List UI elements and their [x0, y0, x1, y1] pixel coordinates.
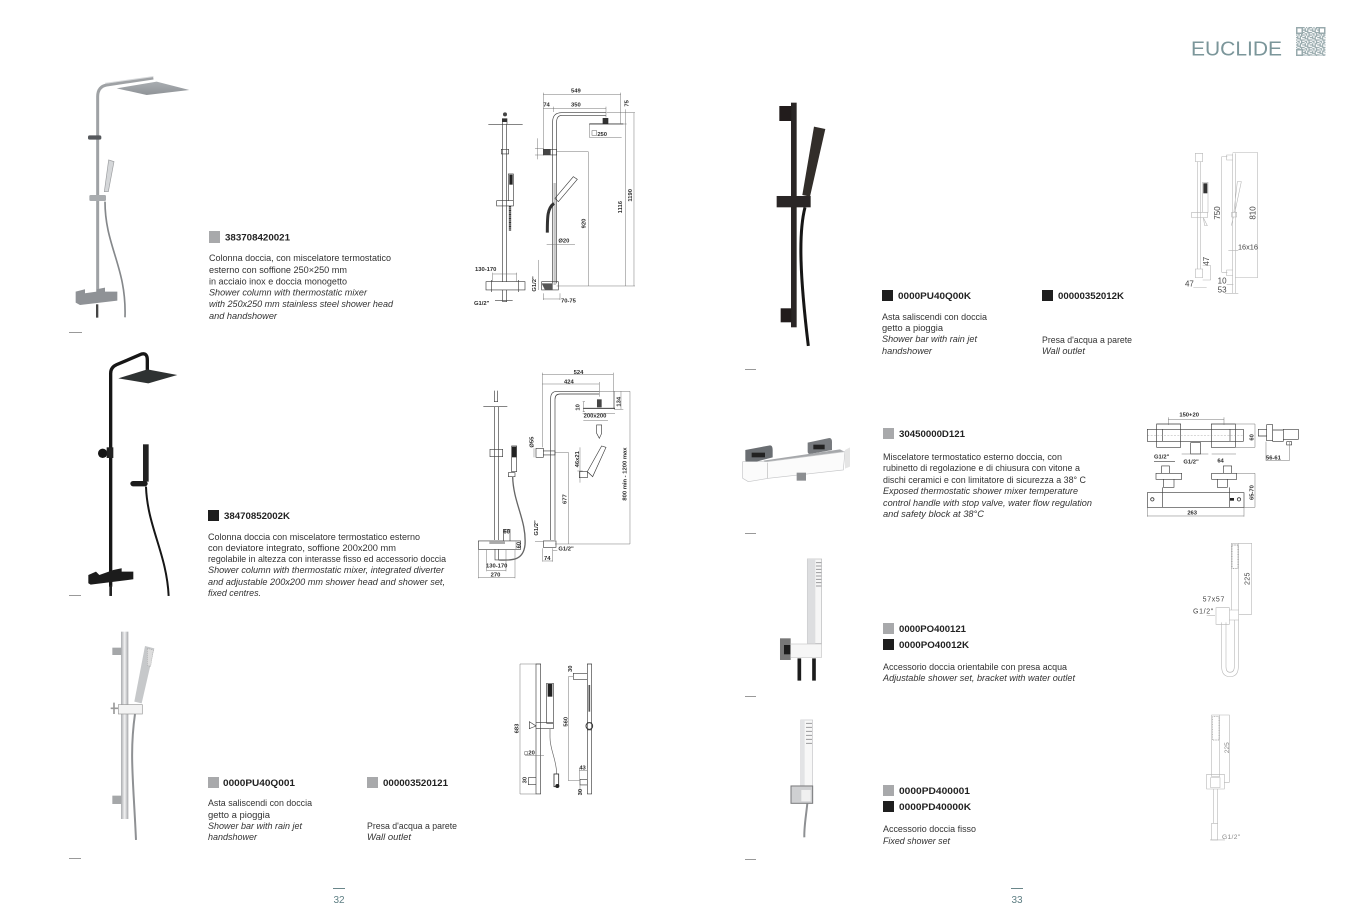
page 32 product 2 swatch and code: 38470852002K: [224, 511, 290, 521]
page 33 product 1 technical drawing: 10: [1218, 277, 1227, 286]
page 33 product 3 description: Adjustable shower set, bracket with water outlet: [882, 673, 1075, 683]
page 32 product 3 description: getto a pioggia: [208, 810, 270, 820]
page 32 wall outlet description: Wall outlet: [367, 832, 412, 842]
page 32 divider mark 2: [69, 594, 81, 596]
page 33 product 3 description: [882, 662, 1075, 683]
page 32 product 2 technical drawing: 46x21: [575, 450, 581, 467]
page 32 product 1 technical drawing: 74: [543, 102, 551, 108]
page 32 product 3 technical drawing: 30: [568, 666, 574, 672]
page 33 product 3 description: Accessorio doccia orientabile con presa acqua: [883, 662, 1067, 672]
page 32 product 2 description: Colonna doccia con miscelatore termostatico esterno: [208, 532, 420, 542]
page 32 product 2 description: and adjustable 200x200 mm shower head and shower set,: [208, 577, 445, 587]
page 32 product 2 technical drawing: 200x200: [584, 413, 606, 419]
page 32 product 2 technical drawing: G1/2": [534, 520, 540, 536]
page 32 product 3 technical drawing: 560: [564, 717, 570, 727]
page 33 product 2 swatch and code: 30450000D121: [899, 429, 965, 439]
page 33 product 2 technical drawing: 65-70: [1250, 485, 1256, 500]
page 32 product 1 description: Colonna doccia, con miscelatore termostatico: [209, 253, 391, 263]
page 32 product 2 technical drawing: 424: [564, 379, 574, 385]
page 32 product 1 technical drawing: 75: [625, 99, 631, 107]
page 32 product 3 second swatch and code: 000003520121: [383, 778, 448, 788]
page 33 product 1 technical drawing: 47: [1185, 280, 1194, 289]
page 33 product 2 description: Exposed thermostatic shower mixer temperature: [883, 486, 1078, 496]
page 32 product 3 description: Shower bar with rain jet: [208, 821, 302, 831]
page 33 product 4 technical drawing: G1/2": [1222, 834, 1241, 841]
page 33 product 3 swatches and codes: 0000PO40012K: [899, 640, 969, 650]
page 32 product 2 technical drawing: 74: [544, 556, 551, 562]
page 32 product 3 technical drawing: 20: [528, 750, 535, 756]
page 32 wall outlet description: Presa d'acqua a parete: [367, 821, 457, 831]
page 32 product 1 technical drawing: 130-170: [475, 267, 496, 273]
page 32 product 1 description: Shower column with thermostatic mixer: [209, 288, 368, 298]
page 32 product 1 technical drawing: 70-75: [561, 299, 577, 305]
page 32 product 3 description: handshower: [208, 832, 258, 842]
page 32 product 2 description: con deviatore integrato, soffione 200x200 mm: [208, 543, 396, 553]
page number 32: [333, 888, 345, 906]
page 33 product 1 description: [882, 312, 987, 356]
page 32 product 2 technical drawing: 60: [503, 529, 510, 535]
page 32 product 3 first swatch and code: 0000PU40Q001: [223, 778, 295, 788]
page 33 product 2 description: rubinetto di regolazione e di chiusura con vitone a: [883, 463, 1080, 473]
page 33 product 4 swatches and codes: [883, 785, 971, 812]
page 32 product 2 technical drawing: Ø55: [529, 436, 535, 448]
page 33 product 3 technical drawing: 225: [1245, 572, 1252, 585]
page 32 product 3 technical drawing: 30: [578, 789, 584, 795]
page 33 wall outlet description: Presa d'acqua a parete: [1042, 335, 1132, 345]
page 33 wall outlet description: Wall outlet: [1042, 346, 1086, 356]
page 33 product 1 first swatch and code: 0000PU40Q00K: [898, 291, 971, 301]
page 32 divider mark 3: [69, 858, 81, 860]
page 33 product 2 technical drawing: [1147, 413, 1298, 517]
page 33 product 1 technical drawing: 47: [1202, 256, 1211, 266]
page 33 product 2 technical drawing: 64: [1217, 459, 1225, 465]
page 32 product 3 description: [208, 798, 312, 842]
icon: QR code: [1296, 27, 1326, 56]
page 33 product 1 description: getto a pioggia: [882, 323, 943, 333]
page 32 product 1 technical drawing: 350: [571, 102, 581, 108]
page 32 product 1 technical drawing: 250: [597, 132, 607, 138]
page 32 product 3 technical drawing: [515, 664, 593, 795]
page 32 product 1 technical drawing: G1/2": [474, 301, 490, 307]
page 33 product 2 description: [883, 452, 1092, 519]
page 32 product 1 technical drawing: G1/2": [532, 276, 538, 292]
page 32 product 2 technical drawing: 270: [491, 573, 500, 579]
page 33 product 2 description: Miscelatore termostatico esterno doccia, con: [883, 452, 1062, 462]
page 33 product 1 first swatch and code: [882, 290, 971, 301]
page 32 divider mark 1: [69, 332, 82, 334]
page 33 product 2 description: and safety block at 38°C: [883, 509, 985, 519]
page 32 product 2: black shower column photo: [88, 354, 177, 596]
page number 33: 33: [1011, 895, 1023, 906]
page 33 product 4 divider mark: [745, 858, 756, 860]
page 32 product 2 technical drawing: G1/2": [558, 547, 574, 553]
page 32 product 2 technical drawing: 10: [575, 404, 581, 411]
page 33 product 3 technical drawing: [1193, 543, 1252, 677]
page 32 product 3 technical drawing: 43: [579, 765, 587, 771]
page 32 wall outlet description: [367, 821, 457, 842]
page 32 product 3 first swatch and code: [208, 777, 295, 788]
page 32 product 2 technical drawing: [478, 370, 630, 579]
page 33 product 1 technical drawing: [1185, 153, 1258, 295]
page 32 product 2 technical drawing: 524: [574, 370, 584, 376]
page 33 product 2 swatch and code: [883, 428, 965, 439]
page 32 product 2 technical drawing: 60: [517, 542, 523, 548]
page number 32: 32: [333, 895, 345, 906]
page 33 product 3 technical drawing: 57x57: [1203, 597, 1225, 604]
page 33 product 2 technical drawing: 263: [1187, 511, 1198, 517]
page 32 product 2 technical drawing: 130-170: [486, 563, 507, 569]
page number 33: [1011, 888, 1023, 906]
page 33 product 1 technical drawing: 750: [1213, 206, 1222, 220]
page 33 product 4 description: Fixed shower set: [883, 836, 950, 846]
page 32 product 1 description: with 250x250 mm stainless steel shower head: [209, 299, 394, 309]
page 33 divider mark 1: [745, 368, 756, 370]
page 32 product 1 description: and handshower: [209, 311, 278, 321]
page 33 product 1 description: handshower: [882, 346, 933, 356]
page 33 header: collection name: EUCLIDE: [1191, 38, 1282, 60]
page 33 product 2 description: dischi ceramici e con limitatore di sicurezza a 38° C: [883, 475, 1086, 485]
page 33 product 3 divider mark: [745, 696, 756, 698]
page 33 product 1 technical drawing: 810: [1249, 206, 1258, 220]
page 32 product 1 technical drawing: 549: [571, 89, 581, 95]
page 33 wall outlet description: [1042, 335, 1132, 356]
page 32 product 1 technical drawing: 1116: [618, 200, 624, 213]
page 33 product 3: adjustable shower set photo: [780, 559, 822, 681]
page 32 product 2 swatch and code: [208, 510, 290, 521]
page 33 product 1: black shower bar photo: [777, 103, 825, 346]
page 33 product 2 description: control handle with stop valve, water flow regulation: [883, 498, 1092, 508]
page 33 divider mark 2: [745, 532, 756, 534]
page 33 product 1 description: Asta saliscendi con doccia: [882, 312, 987, 322]
page 32 product 3 description: Asta saliscendi con doccia: [208, 798, 312, 808]
page 32 product 3 technical drawing: 683: [515, 723, 521, 733]
page 32 product 1 swatch and code: 383708420021: [225, 232, 290, 242]
page 32 product 1 swatch and code: [209, 231, 290, 243]
page 33 product 1 technical drawing: 53: [1218, 286, 1227, 295]
page 32 product 1 description: esterno con soffione 250×250 mm: [209, 265, 347, 275]
page 33 product 4: fixed shower set photo: [791, 720, 813, 837]
page 33 product 4 technical drawing: [1207, 715, 1241, 841]
page 33 product 2 technical drawing: 150+20: [1179, 413, 1199, 419]
page 32 product 2 description: regolabile in altezza con interasse fisso ed accessorio doccia: [208, 554, 446, 564]
page 32 product 2 technical drawing: 134: [617, 396, 623, 407]
page 33 product 3 swatches and codes: [883, 623, 969, 650]
page 32 product 2 technical drawing: 800 min - 1200 max: [623, 447, 629, 501]
page 33 product 2 technical drawing: 60: [1250, 434, 1256, 441]
page 32 product 2 description: fixed centres.: [208, 588, 261, 598]
page 33 product 1 second swatch and code: [1042, 290, 1124, 301]
page 32 product 1 description: in acciaio inox e doccia monogetto: [209, 276, 347, 286]
page 33 product 3 swatches and codes: 0000PO400121: [899, 624, 966, 634]
page 32 product 2 description: Shower column with thermostatic mixer, integrated diverter: [208, 565, 445, 575]
page 33 product 4 description: [883, 824, 976, 846]
page 32 product 3 technical drawing: 30: [523, 777, 529, 783]
page 32 product 1 technical drawing: 920: [581, 219, 587, 228]
page 32 product 3 second swatch and code: [367, 777, 448, 788]
page 32 product 3: chrome shower bar photo: [111, 632, 154, 840]
page 33 product 2 technical drawing: G1/2": [1183, 459, 1199, 465]
page 33 product 3 technical drawing: G1/2": [1193, 609, 1214, 616]
page 33 product 1 technical drawing: 16x16: [1238, 242, 1258, 251]
page 33 product 4 technical drawing: 225: [1224, 742, 1231, 753]
page 32 product 1: chrome shower column photo: [76, 77, 189, 318]
page 33 product 1 second swatch and code: 00000352012K: [1058, 291, 1124, 301]
page 32 product 2 description: [208, 532, 446, 598]
page 33 product 4 swatches and codes: 0000PD40000K: [899, 802, 971, 812]
page 32 product 1 technical drawing: [474, 89, 635, 307]
page 32 product 1 technical drawing: Ø20: [558, 239, 569, 245]
page 32 product 2 technical drawing: 677: [563, 494, 569, 504]
page 33 product 2: thermostatic mixer photo: [743, 438, 850, 482]
page 32 product 1 technical drawing: 1190: [628, 189, 634, 202]
page 33 product 1 description: Shower bar with rain jet: [882, 334, 978, 344]
page 33 product 4 swatches and codes: 0000PD400001: [899, 786, 970, 796]
page 33 product 2 technical drawing: 56-61: [1266, 455, 1282, 461]
page 33 product 2 technical drawing: G1/2": [1154, 455, 1170, 461]
page 32 product 1 description: [209, 253, 394, 321]
page 33 product 4 description: Accessorio doccia fisso: [883, 824, 976, 834]
